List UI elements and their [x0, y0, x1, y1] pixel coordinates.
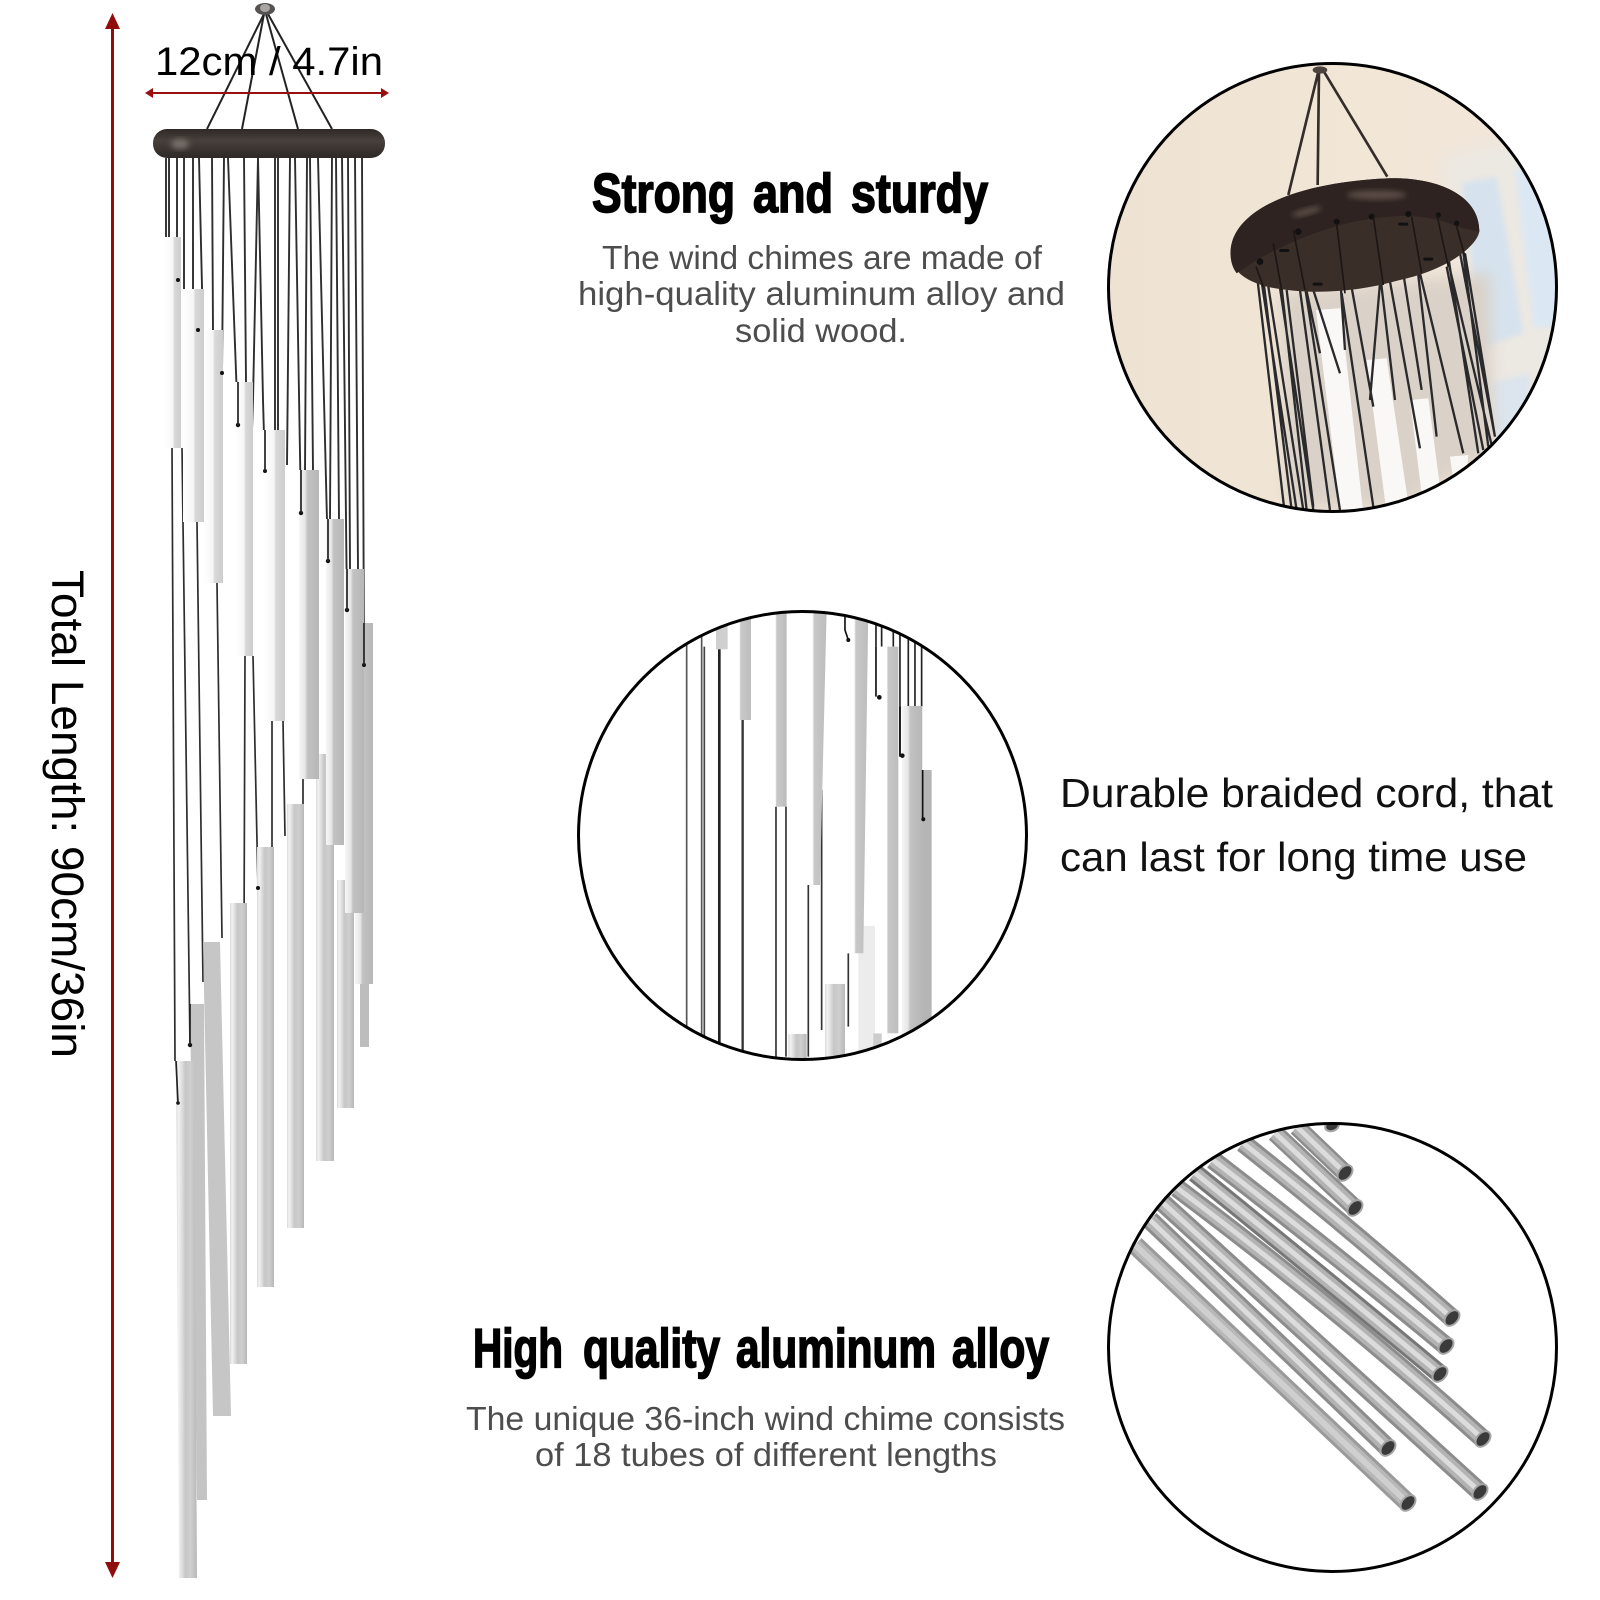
wind chime product photo	[153, 3, 385, 1578]
wooden disc	[1231, 178, 1479, 293]
description: of 18 tubes of different lengths	[535, 1436, 997, 1473]
section: durable braided cord text	[1060, 770, 1554, 880]
description	[578, 239, 1065, 349]
heading: and	[753, 162, 833, 224]
upper tubes	[165, 237, 373, 984]
photo circle: wood disc in room	[1100, 60, 1570, 520]
white tubes	[1316, 308, 1468, 513]
cord hooks	[176, 278, 366, 1105]
photo circle: aluminum tubes close-up	[1100, 1115, 1570, 1585]
ceiling bead	[1313, 66, 1327, 74]
description	[466, 1400, 1065, 1473]
section: durable braided cord text: can last for long time use	[1060, 834, 1527, 880]
heading: quality	[583, 1317, 720, 1379]
window background	[1280, 127, 1567, 507]
lower tubes	[176, 754, 369, 1578]
description: solid wood.	[735, 312, 907, 349]
hanging cords and bead	[207, 3, 332, 129]
cords	[1256, 72, 1495, 510]
heading: Strong	[592, 162, 735, 224]
width arrow	[145, 88, 389, 98]
length arrow	[105, 13, 120, 1578]
length label: Total Length: 90cm/36in	[42, 570, 93, 1058]
tube openings	[1324, 1119, 1493, 1514]
section: high quality aluminum alloy text	[466, 1317, 1065, 1473]
tubes	[716, 610, 932, 1077]
aluminum tubes	[1135, 1127, 1483, 1503]
section: durable braided cord text: Durable braided cord, that	[1060, 770, 1554, 816]
photo circle: braided cords close-up	[570, 600, 1040, 1077]
heading: High	[473, 1317, 563, 1379]
heading: alloy	[952, 1317, 1049, 1379]
total length dimension	[42, 13, 120, 1578]
heading: aluminum	[736, 1317, 936, 1379]
description: The wind chimes are made of	[602, 239, 1043, 276]
width label: 12cm / 4.7in	[155, 40, 383, 84]
heading	[473, 1317, 1049, 1379]
heading	[592, 162, 988, 224]
long cords	[687, 610, 922, 1057]
section: strong and sturdy text	[578, 162, 1065, 349]
chime cords	[166, 158, 364, 1061]
description: high-quality aluminum alloy and	[578, 275, 1065, 312]
heading: sturdy	[851, 162, 988, 224]
wooden ring	[153, 129, 385, 158]
description: The unique 36-inch wind chime consists	[466, 1400, 1065, 1437]
width dimension	[145, 40, 389, 98]
hooks	[845, 610, 923, 820]
